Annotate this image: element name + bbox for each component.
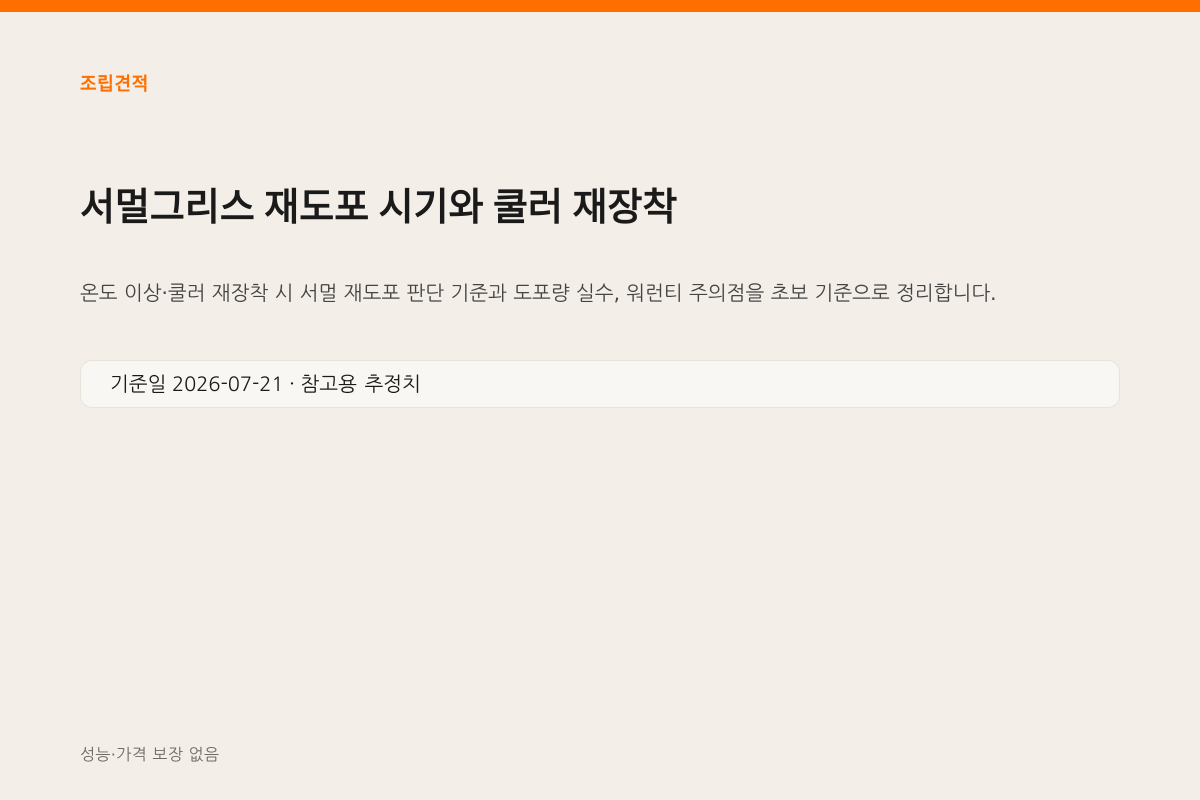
- subtitle: 온도 이상·쿨러 재장착 시 서멀 재도포 판단 기준과 도포량 실수, 워런티 주의점을 초보 기준으로 정리합니다.: [80, 281, 996, 305]
- top accent bar: [0, 0, 1200, 12]
- footer note: 성능·가격 보장 없음: [80, 745, 219, 764]
- category label: 조립견적: [80, 74, 149, 94]
- date note box: 기준일 2026-07-21 · 참고용 추정치: [110, 374, 421, 394]
- date note box: [80, 360, 1120, 408]
- title: 서멀그리스 재도포 시기와 쿨러 재장착: [80, 187, 677, 229]
